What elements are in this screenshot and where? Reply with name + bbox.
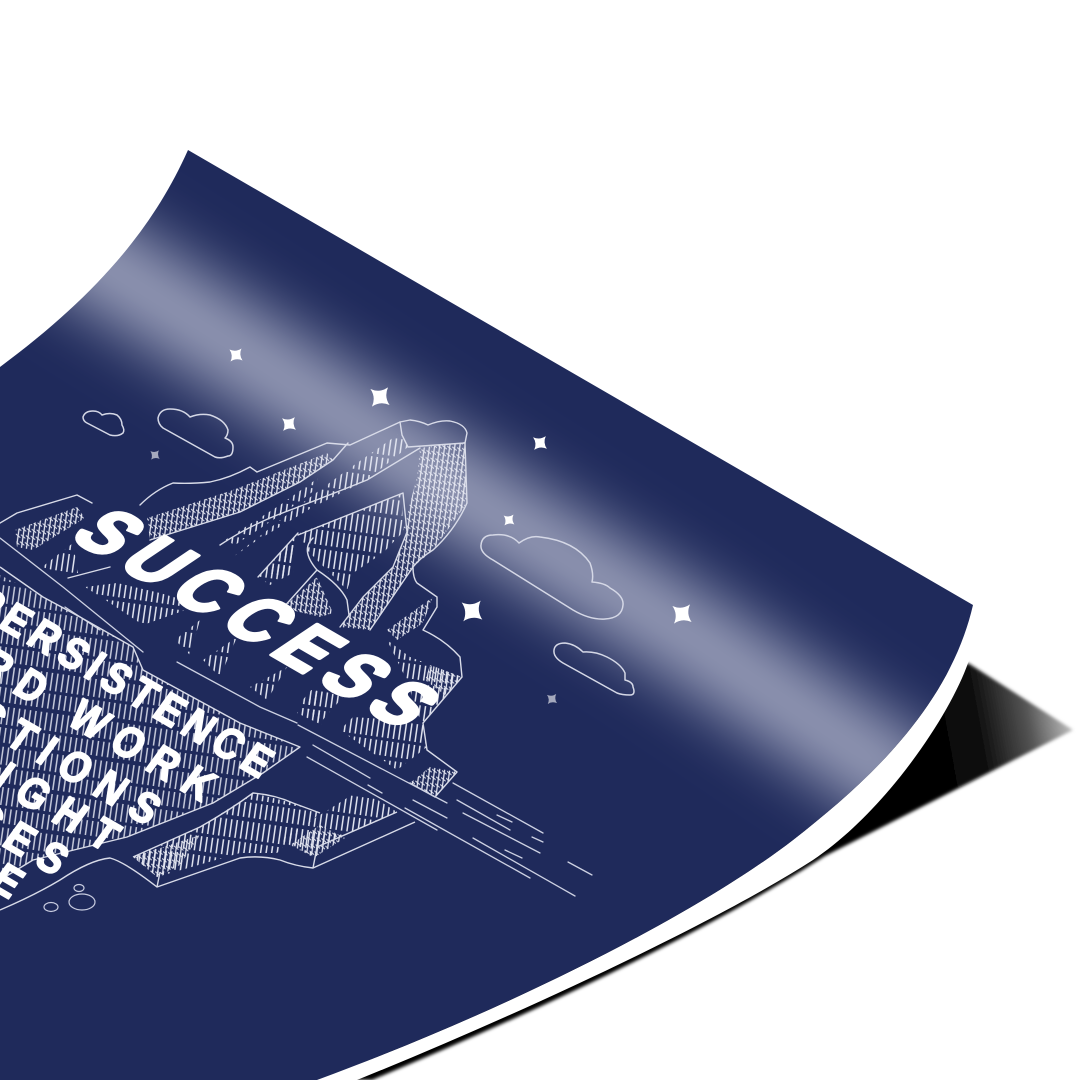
glossy light band [40,225,930,800]
title: SUCCESS: SUCCESS [54,497,459,739]
iceberg: hatching above water [15,433,467,797]
stars [147,343,700,708]
list of hidden iceberg factors [0,577,283,907]
white paper border [317,596,1000,1080]
cast shadow under curled poster [317,596,1073,1080]
artwork clipped to poster [0,343,700,912]
iceberg: below water [0,567,415,910]
iceberg: outline above water [0,420,467,797]
bubbles [44,884,95,912]
clouds [83,409,634,695]
water line [0,538,592,896]
poster sheet [0,150,973,1080]
